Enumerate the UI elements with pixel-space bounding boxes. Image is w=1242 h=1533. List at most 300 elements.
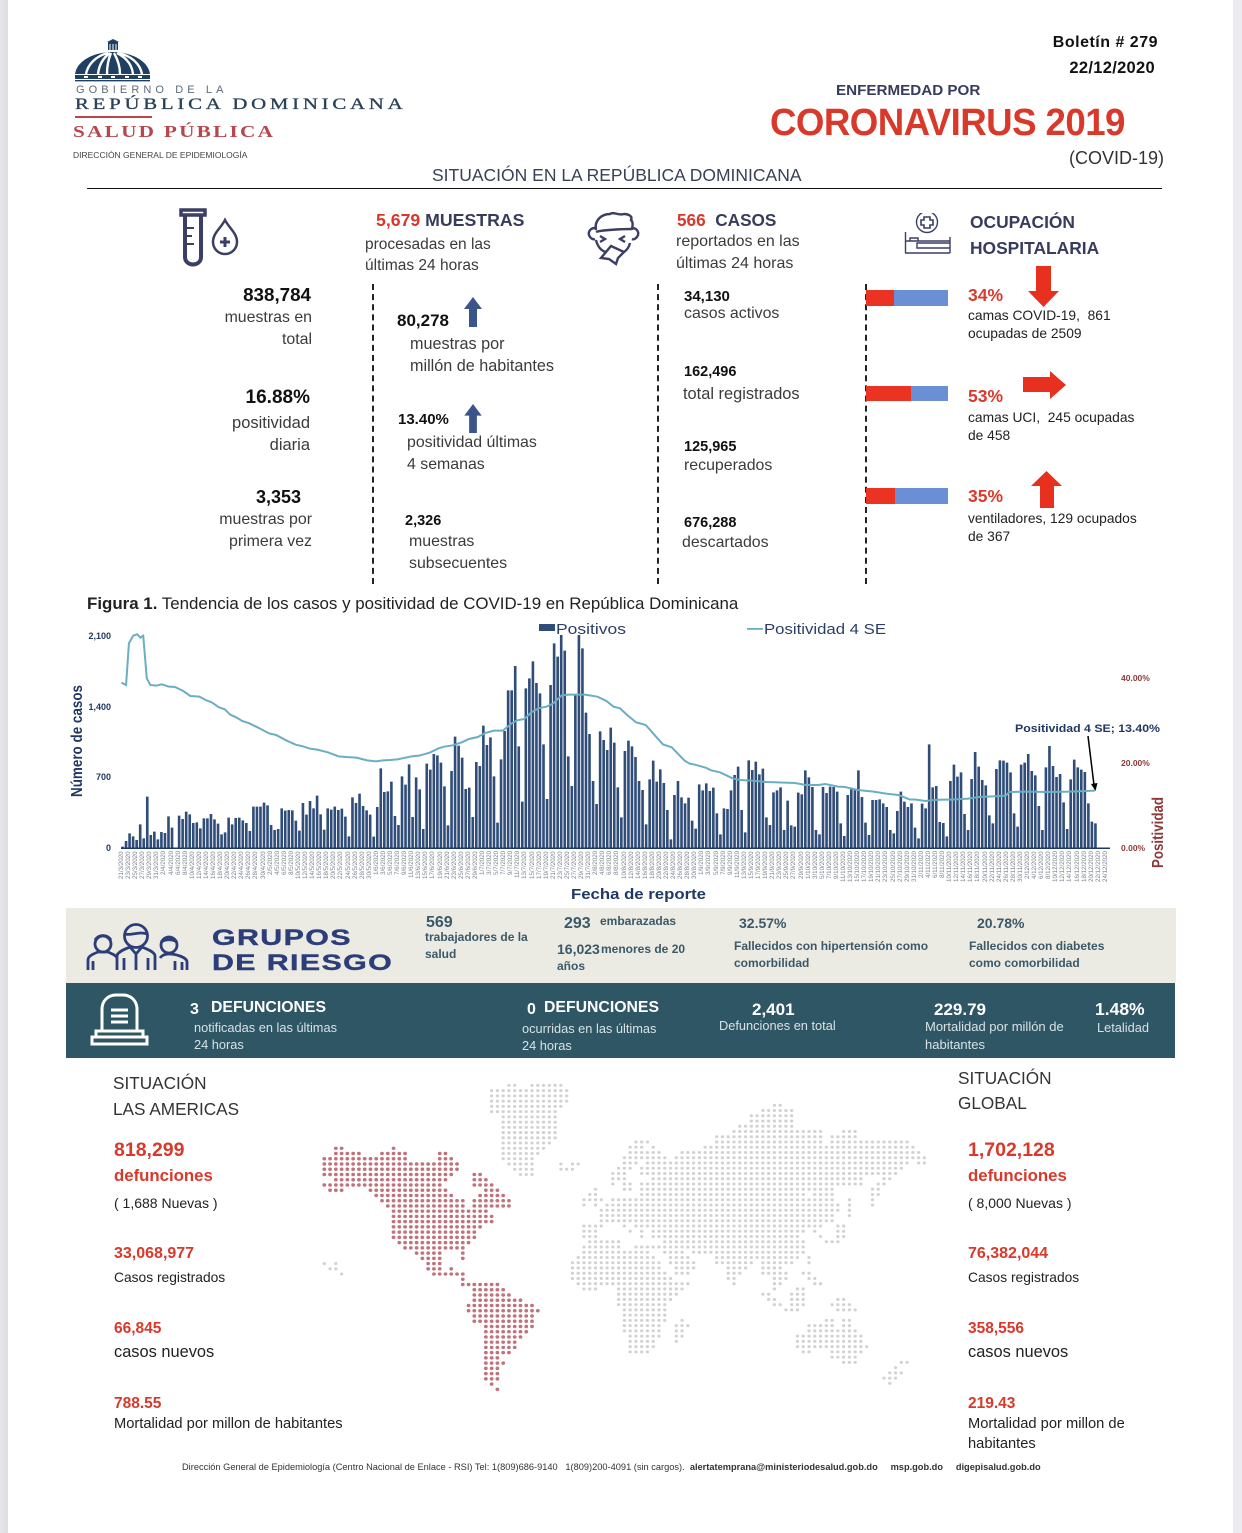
value: diabetes: 20.78%	[977, 915, 1024, 931]
heading: cases: 566 CASOS	[677, 210, 776, 230]
bar: icu beds	[866, 386, 948, 401]
label: samples per million	[410, 335, 554, 375]
x axis date labels: 18/5/2020	[323, 851, 330, 879]
heading: risk groups: GRUPOS	[212, 925, 352, 950]
x axis date labels: 7/7/2020	[500, 851, 507, 875]
x axis date labels: 22/4/2020	[231, 851, 238, 879]
stat: daily positivity: 16.88%	[246, 387, 310, 408]
label: global mortality: habitantes	[968, 1436, 1036, 1452]
logo text: gobierno de la: GOBIERNO DE LA	[76, 84, 228, 96]
x axis date labels: 17/7/2020	[536, 851, 543, 879]
x axis date labels: 22/8/2020	[663, 851, 670, 879]
x axis date labels: 21/6/2020	[444, 851, 451, 879]
arrow: up	[1031, 471, 1062, 508]
label: subsequent samples	[409, 533, 507, 572]
x axis date labels: 16/12/2020	[1074, 851, 1081, 882]
x axis date labels: 26/8/2020	[677, 851, 684, 879]
x axis date labels: 12/5/2020	[302, 851, 309, 879]
x axis date labels: 19/7/2020	[543, 851, 550, 879]
x axis date labels: 13/6/2020	[415, 851, 422, 879]
left axis labels: 2,100	[88, 631, 111, 641]
x axis date labels: 3/7/2020	[486, 851, 493, 875]
x axis date labels: 28/5/2020	[359, 851, 366, 879]
icon: tombstone	[90, 993, 150, 1046]
x axis date labels: 16/4/2020	[210, 851, 217, 879]
logo text: direccion: DIRECCIÓN GENERAL DE EPIDEMIOLOGÍA	[73, 150, 247, 160]
line: positivity 4 weeks	[121, 634, 1095, 801]
legend: Positividad 4 SE	[764, 622, 886, 638]
label: daily positivity	[232, 414, 310, 454]
x axis date labels: 29/9/2020	[798, 851, 804, 879]
x axis date labels: 7/10/2020	[826, 851, 833, 879]
chart: cases and positivity trend	[69, 622, 1167, 903]
x axis date labels: 8/8/2020	[613, 851, 620, 875]
label: americas mortality: Mortalidad por millon de habitantes	[114, 1416, 343, 1432]
x axis date labels: 21/7/2020	[550, 851, 557, 879]
x axis date labels: 28/11/2020	[1010, 851, 1017, 882]
kicker: ENFERMEDAD POR	[836, 82, 980, 99]
stat: total registered: 162,496	[684, 364, 736, 380]
panel: cases	[588, 210, 800, 551]
x axis date labels: 5/10/2020	[819, 851, 826, 879]
x axis date labels: 21/10/2020	[875, 851, 882, 882]
x axis date labels: 15/10/2020	[854, 851, 861, 882]
label: diabetes: Fallecidos con diabetes	[969, 939, 1104, 953]
x axis date labels: 12/4/2020	[196, 851, 203, 879]
x axis date labels: 21/9/2020	[769, 851, 776, 879]
x axis date labels: 26/4/2020	[245, 851, 252, 879]
x axis date labels: 28/8/2020	[684, 851, 691, 879]
x axis date labels: 4/5/2020	[274, 851, 281, 875]
arrow: up	[464, 404, 482, 433]
label: first-time samples	[219, 511, 312, 550]
value: under 20: 16,023	[557, 941, 600, 957]
x axis date labels: 12/12/2020	[1059, 851, 1066, 882]
x axis date labels: 6/12/2020	[1038, 851, 1045, 879]
x axis date labels: 14/11/2020	[960, 851, 967, 882]
x axis date labels: 15/7/2020	[529, 851, 536, 879]
value: deaths occurred count: 0	[527, 1001, 536, 1018]
label: mortality per million	[925, 1018, 1064, 1054]
x axis date labels: 6/4/2020	[175, 851, 182, 875]
x axis date labels: 29/7/2020	[578, 851, 585, 879]
stat: 4-week positivity: 13.40%	[398, 411, 449, 428]
bar: ventilators	[866, 488, 948, 504]
x axis date labels: 31/10/2020	[911, 851, 918, 882]
x axis date labels: 24/12/2020	[1102, 851, 1109, 882]
text: icu beds: camas UCI, 245 ocupadas	[968, 410, 1134, 425]
value: lethality: 1.48%	[1095, 999, 1145, 1019]
label: daily positivity: positividad	[232, 414, 310, 432]
stat: total deaths	[716, 1000, 846, 1040]
x axis date labels: 22/12/2020	[1095, 851, 1102, 882]
x axis date labels: 9/10/2020	[833, 851, 840, 879]
x axis date labels: 12/11/2020	[953, 851, 960, 882]
stat: mortality per million	[924, 1000, 1074, 1055]
x axis date labels: 11/6/2020	[408, 851, 415, 878]
icon: test tube and drop	[179, 208, 238, 266]
bar: covid beds	[866, 290, 948, 306]
legend	[539, 622, 886, 638]
x axis date labels: 11/9/2020	[734, 851, 741, 878]
x axis date labels: 8/11/2020	[939, 851, 946, 878]
stat: global deaths: 1,702,128	[968, 1139, 1055, 1161]
x axis date labels: 13/9/2020	[741, 851, 748, 879]
x axis date labels: 25/6/2020	[458, 851, 465, 879]
x axis date labels: 14/5/2020	[309, 851, 316, 879]
heading: occupancy: HOSPITALARIA	[970, 238, 1099, 258]
label: diabetes: como comorbilidad	[969, 956, 1080, 970]
label: under 20: menores de 20	[601, 942, 685, 956]
x axis date labels: 10/5/2020	[295, 851, 302, 879]
label: americas cases: Casos registrados	[114, 1270, 225, 1285]
x axis date labels: 30/4/2020	[260, 851, 267, 879]
text: samples processed	[365, 236, 491, 274]
x axis date labels: 20/8/2020	[656, 851, 663, 879]
icon: face with mask	[588, 212, 640, 266]
heading: global	[958, 1066, 1052, 1116]
panel: deaths	[66, 983, 1175, 1058]
x axis date labels: 16/8/2020	[642, 851, 649, 879]
x axis date labels: 27/6/2020	[465, 851, 472, 879]
panel: hospital occupancy	[866, 212, 1137, 544]
bulletin date: 22/12/2020	[1069, 59, 1155, 77]
x axis date labels: 26/11/2020	[1003, 851, 1010, 882]
x axis date labels: 5/7/2020	[493, 851, 500, 875]
value: mortality per million: 229.79	[934, 1000, 986, 1019]
right axis labels: 40.00%	[1121, 673, 1150, 683]
map: greenland, iceland and hawaii	[324, 1085, 578, 1274]
x axis date labels: 18/11/2020	[974, 851, 981, 882]
stat: americas cases: 33,068,977	[114, 1245, 194, 1262]
heading: americas	[113, 1070, 239, 1122]
x axis date labels: 17/6/2020	[429, 851, 436, 879]
label: deaths notified: 24 horas	[194, 1037, 244, 1052]
x axis date labels: 31/3/2020	[153, 851, 160, 879]
left axis labels	[88, 631, 111, 853]
x axis date labels: 19/10/2020	[868, 851, 875, 882]
x axis date labels: 31/7/2020	[585, 851, 592, 879]
label: deaths occurred: 24 horas	[522, 1038, 572, 1053]
heading: occupancy: OCUPACIÓN	[970, 212, 1075, 232]
label: total registered: total registrados	[683, 385, 800, 403]
x axis date labels: 1/10/2020	[805, 851, 812, 879]
x axis date labels: 1/6/2020	[373, 851, 380, 875]
text: icu beds: de 458	[968, 428, 1010, 443]
baseline	[121, 848, 1110, 849]
x axis date labels: 5/9/2020	[713, 851, 720, 875]
heading: occupancy	[970, 212, 1099, 258]
panel: global situation	[950, 1065, 1170, 1455]
x axis date labels: 27/3/2020	[139, 851, 146, 879]
label: samples per million: muestras por	[410, 335, 504, 353]
heading: deaths occurred: DEFUNCIONES	[544, 999, 659, 1016]
x axis date labels: 13/10/2020	[847, 851, 854, 882]
x axis date labels: 10/12/2020	[1052, 851, 1059, 882]
x axis date labels: 7/9/2020	[720, 851, 727, 875]
label: deaths notified: notificadas en las últimas	[194, 1020, 337, 1035]
x axis date labels: 9/9/2020	[727, 851, 734, 875]
stat: americas new cases: 66,845	[114, 1320, 161, 1337]
x axis date labels: 23/10/2020	[882, 851, 889, 882]
label: total samples: total	[282, 331, 312, 348]
label: global deaths: defunciones	[968, 1166, 1067, 1185]
stat: pregnant	[564, 914, 676, 932]
label: global new cases: casos nuevos	[968, 1343, 1068, 1361]
x axis date labels: 23/9/2020	[776, 851, 783, 879]
value: pregnant: 293	[564, 915, 591, 932]
x axis date labels: 27/10/2020	[897, 851, 904, 882]
x axis date labels: 27/9/2020	[790, 851, 797, 879]
label: americas deaths: defunciones	[114, 1166, 213, 1185]
label: deaths occurred	[522, 1020, 656, 1054]
right axis labels: 0.00%	[1121, 843, 1146, 853]
x axis date labels: 24/5/2020	[344, 851, 352, 879]
label: global mortality	[968, 1414, 1125, 1454]
label: 4-week positivity: 4 semanas	[407, 456, 485, 472]
x axis date labels: 24/8/2020	[670, 851, 677, 879]
x axis date labels: 3/6/2020	[380, 851, 387, 875]
dot map: world	[310, 1070, 930, 1400]
stat: global mortality: 219.43	[968, 1395, 1015, 1412]
stat: deaths notified	[186, 998, 346, 1053]
stat: ventilators: 35%	[968, 486, 1003, 506]
heading: americas: SITUACIÓN	[113, 1073, 207, 1093]
callout: latest positivity: Positividad 4 SE; 13.40%	[1015, 723, 1160, 735]
text: samples processed: últimas 24 horas	[365, 257, 479, 274]
x axis date labels: 26/5/2020	[352, 851, 359, 879]
label: health workers	[425, 930, 528, 961]
x axis date labels: 2/8/2020	[592, 851, 599, 875]
x axis date labels: 20/12/2020	[1088, 851, 1095, 882]
x axis date labels: 25/3/2020	[132, 851, 139, 879]
left axis labels: 0	[106, 843, 111, 853]
x axis date labels: 9/7/2020	[507, 851, 514, 875]
x axis date labels: 1/7/2020	[479, 851, 486, 875]
x axis date labels: 3/9/2020	[705, 851, 712, 875]
x axis date labels: 12/8/2020	[628, 851, 635, 879]
x axis title: Fecha de reporte	[571, 886, 706, 903]
x axis date labels: 6/5/2020	[281, 851, 288, 875]
panel: situation in the americas	[100, 1070, 360, 1455]
text: americas new deaths: ( 1,688 Nuevas )	[114, 1195, 218, 1211]
label: global cases: Casos registrados	[968, 1270, 1079, 1285]
stat: lethality	[1094, 1000, 1154, 1040]
text: covid beds: camas COVID-19, 861	[968, 308, 1111, 323]
x axis date labels: 7/6/2020	[394, 851, 401, 875]
label: total deaths: Defunciones en total	[719, 1018, 836, 1033]
x axis date labels: 8/5/2020	[288, 851, 295, 875]
stat: deaths occurred	[516, 998, 676, 1053]
x axis date labels: 20/4/2020	[224, 851, 231, 879]
label: hypertension	[734, 939, 928, 970]
x axis date labels: 3/10/2020	[812, 851, 819, 879]
x axis date labels: 5/6/2020	[387, 851, 394, 875]
right axis labels	[1121, 673, 1150, 853]
text: ventilators	[968, 511, 1137, 544]
x axis date labels: 25/7/2020	[564, 851, 571, 879]
value: deaths notified count: 3	[190, 1001, 199, 1018]
x axis date labels: 2/11/2020	[918, 851, 925, 878]
x axis date labels: 16/5/2020	[316, 851, 323, 879]
x axis date labels: 17/9/2020	[755, 851, 762, 879]
x axis date labels: 16/11/2020	[967, 851, 974, 882]
label: 4-week positivity: positividad últimas	[407, 434, 537, 451]
title block	[770, 34, 1164, 168]
stat: hypertension	[734, 915, 928, 970]
x axis date labels: 23/3/2020	[125, 851, 132, 879]
x axis date labels: 6/11/2020	[932, 851, 939, 878]
label: total samples	[225, 309, 312, 348]
text: covid beds	[968, 308, 1111, 341]
arrow: down	[1028, 266, 1059, 307]
x axis date labels: 27/7/2020	[571, 851, 578, 879]
heading: global: GLOBAL	[958, 1093, 1027, 1113]
x axis date labels: 11/7/2020	[514, 851, 521, 878]
stat: diabetes	[968, 915, 1118, 970]
stat: active cases: 34,130	[684, 288, 730, 305]
figure caption: Figura 1. Tendencia de los casos y positividad de COVID-19 en República Dominicana	[87, 594, 738, 613]
label: total samples: muestras en	[225, 309, 312, 326]
x axis date labels: 29/6/2020	[472, 851, 479, 879]
x axis date labels: 18/12/2020	[1081, 851, 1088, 882]
x axis date labels: 21/3/2020	[118, 851, 125, 879]
label: deaths occurred: ocurridas en las últimas	[522, 1021, 656, 1036]
label: health workers: trabajadores de la	[425, 930, 528, 944]
x axis date labels: 8/4/2020	[182, 851, 189, 875]
x axis date labels: 2/4/2020	[160, 851, 167, 875]
main title: CORONAVIRUS 2019	[770, 102, 1125, 144]
text: icu beds	[968, 410, 1134, 443]
bars: daily positive cases	[122, 635, 1095, 848]
x axis date labels: 18/8/2020	[649, 851, 656, 879]
x axis date labels: 23/7/2020	[557, 851, 564, 879]
stat: samples per million: 80,278	[397, 311, 449, 330]
left axis labels: 1,400	[88, 702, 111, 712]
footer contact line: Dirección General de Epidemiología (Centro Nacional de Enlace - RSI) Tel: 1(809)686-9140 1(809)200-4091 (sin cargos). alertatemprana@ministeriodesalud.gob.do msp.gob.do digepisalud.gob.do	[182, 1462, 1041, 1472]
label: years: años	[557, 959, 585, 973]
label: subsequent samples: subsecuentes	[409, 555, 507, 572]
x axis date labels: 22/5/2020	[337, 851, 344, 879]
label: hypertension: comorbilidad	[734, 956, 809, 970]
label: mortality per million: habitantes	[925, 1037, 985, 1052]
text: ventilators: ventiladores, 129 ocupados	[968, 511, 1137, 526]
heading: americas: LAS AMERICAS	[113, 1099, 239, 1119]
panel: totals of samples	[179, 208, 312, 550]
x axis date labels: 22/11/2020	[989, 851, 996, 882]
value: hypertension: 32.57%	[739, 915, 786, 931]
text: covid beds: ocupadas de 2509	[968, 326, 1082, 341]
heading: risk groups: DE RIESGO	[212, 950, 393, 975]
right axis title: Positividad	[1150, 797, 1167, 868]
label: mortality per million: Mortalidad por millón de	[925, 1019, 1064, 1034]
label: discarded: descartados	[682, 534, 769, 551]
label: 4-week positivity	[407, 434, 537, 472]
x axis date labels: 4/12/2020	[1031, 851, 1038, 879]
x axis date labels: 10/11/2020	[946, 851, 953, 882]
x axis date labels: 2/12/2020	[1024, 851, 1031, 879]
stat: covid beds: 34%	[968, 285, 1003, 305]
stat: health workers	[425, 914, 528, 961]
label: samples per million: millón de habitantes	[410, 357, 554, 375]
text: global new deaths: ( 8,000 Nuevas )	[968, 1195, 1072, 1211]
heading: samples: 5,679 MUESTRAS	[376, 210, 524, 230]
x axis date labels: 17/10/2020	[861, 851, 868, 882]
x axis date labels: 2/5/2020	[267, 851, 274, 875]
text: ventilators: de 367	[968, 529, 1010, 544]
stat: under 20	[557, 941, 685, 973]
callout: latest positivity	[1015, 723, 1160, 791]
x axis date labels: 1/9/2020	[698, 851, 705, 875]
stat: discarded: 676,288	[684, 515, 736, 531]
arrow: right	[1023, 371, 1066, 399]
label: global mortality: Mortalidad por millon de	[968, 1416, 1125, 1432]
text: cases reported	[676, 233, 800, 272]
x axis date labels: 30/5/2020	[366, 851, 373, 879]
x axis date labels: 8/12/2020	[1045, 851, 1052, 879]
panel: risk groups	[66, 908, 1176, 983]
x axis date labels: 25/9/2020	[783, 851, 790, 879]
label: first-time samples: muestras por	[219, 511, 312, 528]
section heading: SITUACIÓN EN LA REPÚBLICA DOMINICANA	[432, 165, 802, 185]
label: subsequent samples: muestras	[409, 533, 474, 550]
panel: samples	[365, 210, 554, 572]
x axis date labels: 13/7/2020	[521, 851, 528, 879]
label: first-time samples: primera vez	[229, 533, 312, 550]
text: cases reported: reportados en las	[676, 233, 800, 250]
x axis date labels: 15/9/2020	[748, 851, 755, 879]
x axis date labels: 6/8/2020	[606, 851, 613, 875]
x axis date labels: 14/12/2020	[1066, 851, 1073, 882]
x axis date labels: 29/3/2020	[146, 851, 153, 879]
heading: global: SITUACIÓN	[958, 1068, 1052, 1088]
stat: icu beds: 53%	[968, 386, 1003, 406]
subtitle: (COVID-19)	[1069, 148, 1164, 168]
x axis date labels: 23/6/2020	[451, 851, 458, 879]
x axis date labels: 4/8/2020	[599, 851, 606, 875]
arrow: up	[464, 297, 482, 327]
stat: recovered: 125,965	[684, 439, 736, 455]
logo text: republica dominicana: REPÚBLICA DOMINICANA	[75, 96, 406, 113]
x axis date labels: 25/10/2020	[890, 851, 897, 882]
x axis date labels: 4/11/2020	[925, 851, 932, 878]
icon: three people	[86, 923, 188, 970]
x axis date labels: 28/4/2020	[252, 851, 259, 879]
x axis date labels: 24/4/2020	[238, 851, 245, 879]
x axis date labels: 10/8/2020	[621, 851, 628, 879]
label: pregnant: embarazadas	[600, 914, 676, 928]
logo: gobierno salud publica	[73, 39, 406, 160]
x axis date labels: 9/6/2020	[401, 851, 408, 875]
value: total deaths: 2,401	[752, 1000, 795, 1019]
heading: deaths notified: DEFUNCIONES	[211, 999, 326, 1016]
label: lethality: Letalidad	[1097, 1020, 1149, 1035]
stat: americas deaths: 818,299	[114, 1139, 184, 1161]
x axis date labels: 20/5/2020	[330, 851, 337, 879]
left axis labels: 700	[96, 772, 111, 782]
stat: first-time samples: 3,353	[256, 487, 301, 507]
label: active cases: casos activos	[684, 305, 779, 322]
x axis date labels: 29/10/2020	[904, 851, 911, 882]
x axis date labels: 24/11/2020	[996, 851, 1003, 882]
icon: dome	[75, 39, 150, 82]
label: americas new cases: casos nuevos	[114, 1343, 214, 1361]
left axis title: Número de casos	[69, 685, 86, 797]
stat: americas mortality: 788.55	[114, 1395, 161, 1412]
map: europe, africa, asia, oceania	[572, 1105, 924, 1383]
legend: Positivos	[556, 622, 626, 638]
x axis date labels: 30/11/2020	[1017, 851, 1024, 882]
